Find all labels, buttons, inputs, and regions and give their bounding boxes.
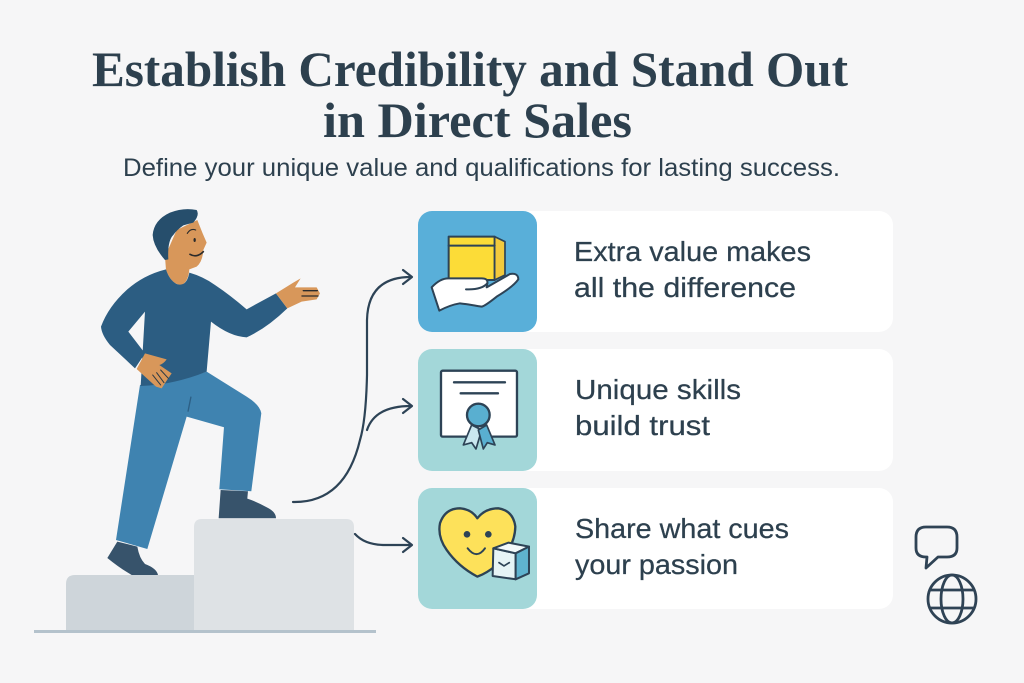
panel: unique skills — [418, 349, 893, 471]
icon tile: unique skills — [418, 349, 537, 471]
card text: share passion — [575, 513, 789, 580]
icon: globe — [928, 575, 976, 623]
arrow: to unique skills — [367, 399, 412, 430]
front shoe — [219, 490, 276, 518]
panel: extra value — [418, 211, 893, 332]
card text: unique skills: build trust — [575, 410, 710, 441]
card text: extra value: all the difference — [574, 272, 796, 303]
title: Establish Credibility and Stand Out — [92, 41, 848, 97]
back shoe — [107, 542, 158, 575]
subtitle: Define your unique value and qualifications for lasting success. — [123, 154, 840, 182]
hair — [153, 209, 198, 260]
panel: share passion — [418, 488, 893, 609]
card text: share passion: your passion — [575, 549, 738, 580]
illustration: person stepping up — [101, 209, 320, 575]
front hand — [276, 278, 320, 308]
head and neck — [165, 220, 207, 285]
title: in Direct Sales — [323, 92, 632, 148]
icon tile: share passion — [418, 488, 537, 609]
card text: extra value: Extra value makes — [574, 236, 811, 267]
illustration: steps — [34, 519, 376, 633]
card text: share passion: Share what cues — [575, 513, 789, 544]
icon tile: extra value — [418, 211, 537, 332]
icon: certificate — [441, 371, 517, 449]
icon: heart and box — [439, 508, 529, 579]
face details — [187, 229, 203, 256]
title — [92, 41, 848, 148]
card text: unique skills: Unique skills — [575, 374, 741, 405]
icon: speech bubble — [916, 527, 957, 568]
card text: unique skills — [575, 374, 741, 441]
card text: extra value — [574, 236, 811, 303]
sweater — [101, 269, 287, 386]
icon: box on hand — [432, 237, 518, 311]
trousers — [116, 372, 261, 549]
arrow: to extra value — [293, 270, 412, 502]
back hand on hip — [137, 353, 172, 388]
arrow: to share passion — [355, 534, 412, 552]
